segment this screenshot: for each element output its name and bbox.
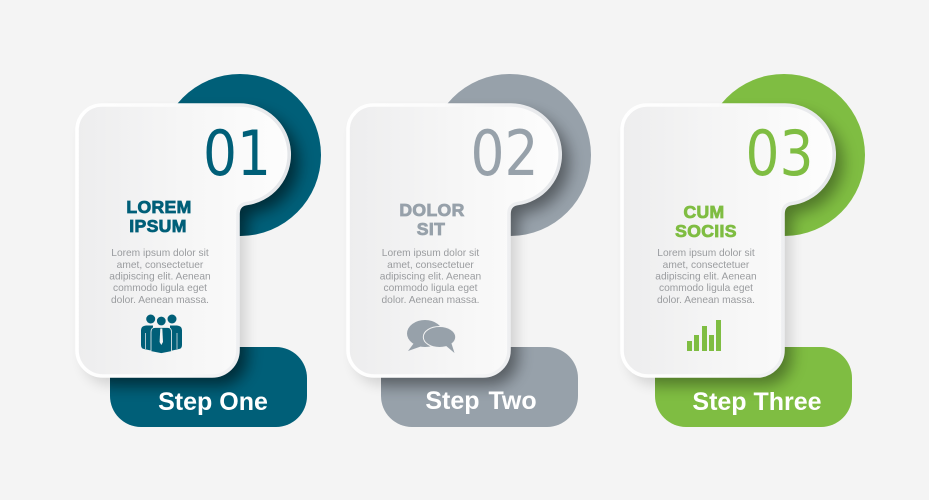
icon: speech bubbles — [407, 320, 456, 353]
text block: step one description: adipiscing elit. Aenean — [109, 272, 211, 282]
text block: step three description: Lorem ipsum dolor sit — [657, 248, 755, 259]
circle: step two backdrop — [429, 74, 591, 236]
number 03: 03 — [746, 117, 814, 190]
heading: cum sociis: CUM — [683, 202, 725, 222]
panel: step two — [348, 74, 591, 427]
text block: step two description: amet, consectetuer — [387, 260, 474, 271]
card: step three — [622, 105, 834, 376]
text block: step three description: adipiscing elit. Aenean — [655, 272, 757, 282]
text block: step two description: Lorem ipsum dolor sit — [382, 248, 479, 259]
number 02: 02 — [470, 117, 538, 190]
panel: step one — [77, 74, 321, 427]
shadow: step three card on colour — [631, 114, 843, 385]
card: step one — [77, 105, 289, 376]
text block: step three description: dolor. Aenean massa. — [657, 295, 755, 306]
heading: lorem ipsum: IPSUM — [129, 216, 187, 236]
step three label: Step Three — [692, 388, 822, 416]
shadow: step two card on colour — [357, 114, 569, 385]
text block: step one description: Lorem ipsum dolor sit — [111, 248, 209, 259]
heading: dolor sit: SIT — [417, 219, 445, 239]
heading: cum sociis: SOCIIS — [675, 221, 737, 241]
text block: step two description: dolor. Aenean massa. — [382, 295, 479, 306]
text block: step one description: dolor. Aenean massa. — [111, 295, 209, 306]
shadow: step three card on background — [629, 113, 841, 384]
pill: step one label background — [110, 347, 307, 427]
panel: step three — [622, 74, 865, 427]
shadow: step two card on background — [355, 113, 567, 384]
pill: step two label background — [381, 347, 578, 427]
step one label: Step One — [158, 388, 268, 416]
shadow: step one card on background — [84, 113, 296, 384]
number 01: 01 — [203, 117, 271, 190]
text block: step one description: commodo ligula eget — [113, 283, 207, 294]
text block: step two description: adipiscing elit. Aenean — [380, 272, 481, 282]
card: step two — [348, 105, 560, 376]
heading: lorem ipsum: LOREM — [126, 197, 192, 217]
icon: business people — [141, 314, 182, 354]
heading: dolor sit: DOLOR — [399, 200, 465, 220]
pill: step three label background — [655, 347, 852, 427]
icon: bar chart — [687, 320, 721, 351]
text block: step two description: commodo ligula eget — [383, 283, 478, 294]
circle: step three backdrop — [703, 74, 865, 236]
text block: step one description: amet, consectetuer — [117, 260, 204, 271]
text block: step three description: amet, consectetuer — [663, 260, 750, 271]
shadow: step one card on colour — [86, 114, 298, 385]
circle: step one backdrop — [159, 74, 321, 236]
text block: step three description: commodo ligula eget — [659, 283, 753, 294]
step two label: Step Two — [425, 387, 537, 415]
